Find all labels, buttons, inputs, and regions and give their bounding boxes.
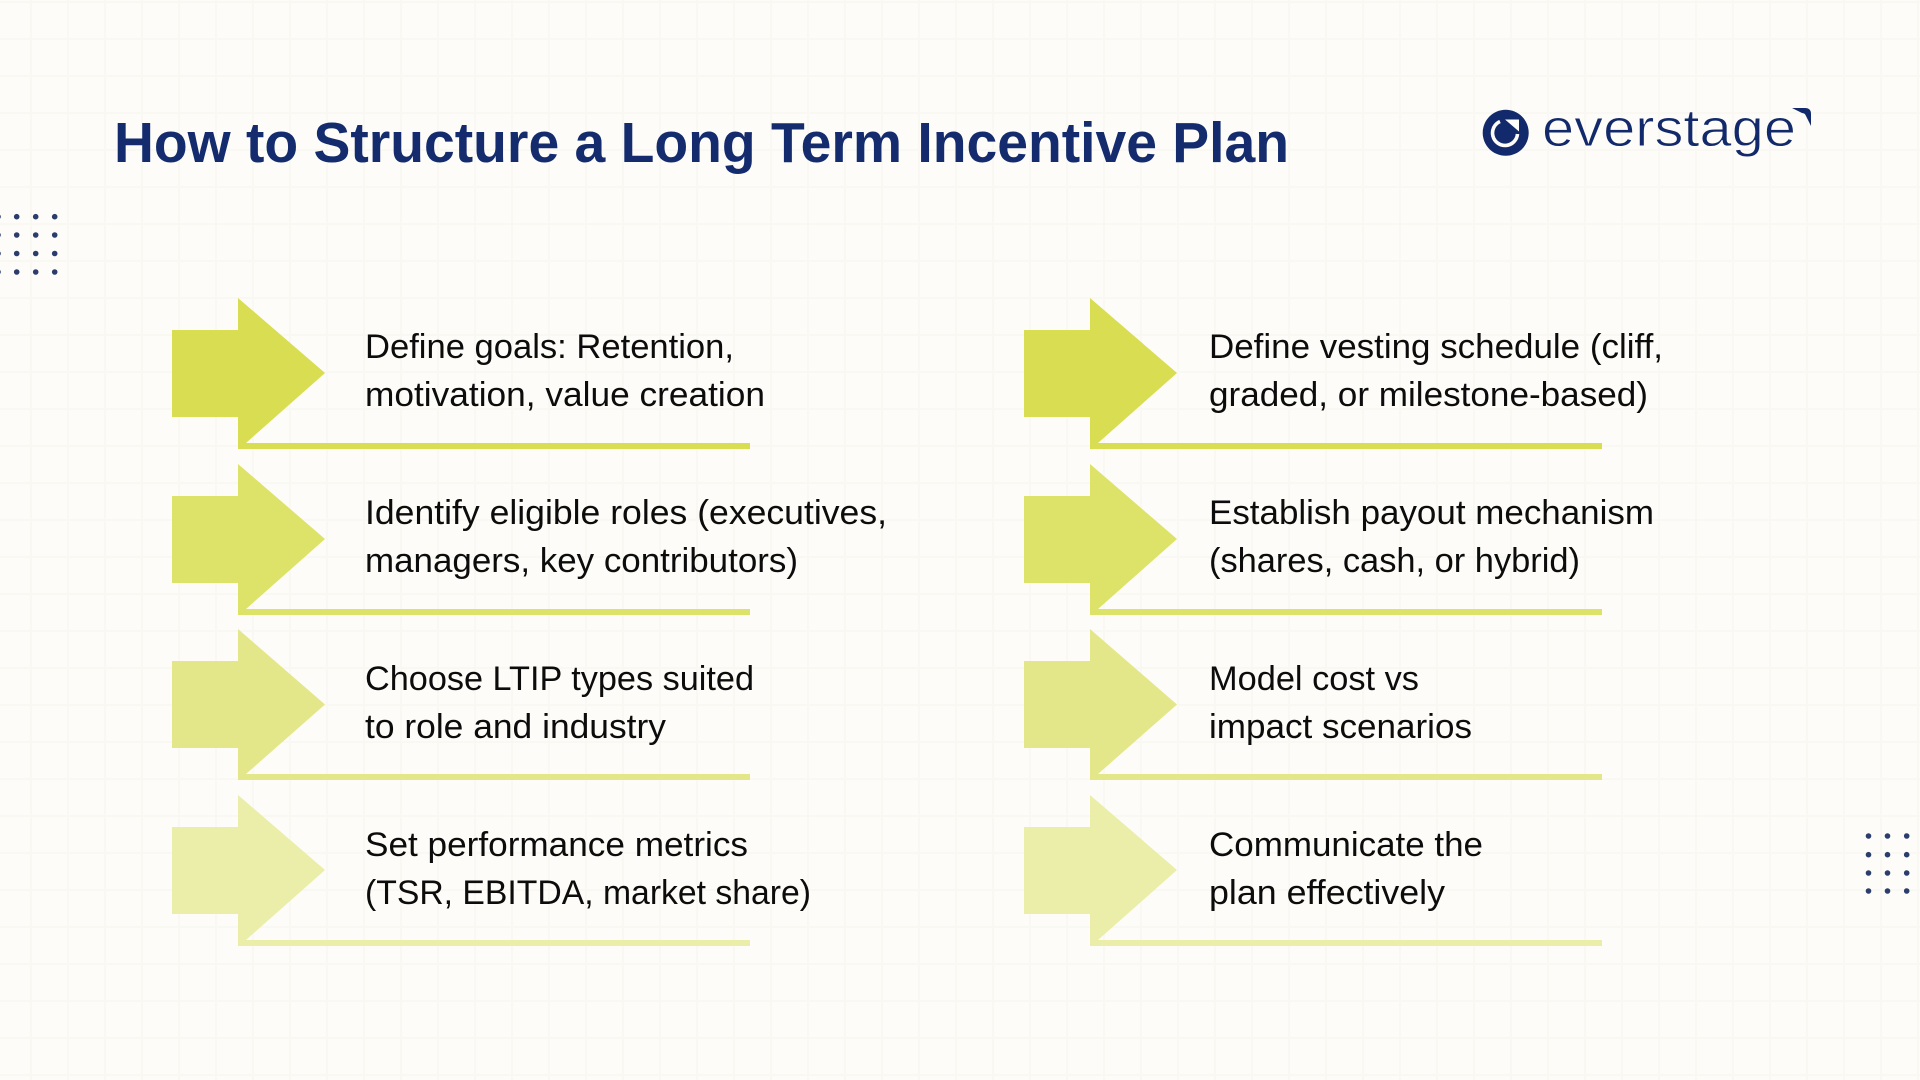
step text: plan effectively bbox=[1209, 874, 1446, 912]
step text: managers, key contributors) bbox=[365, 542, 798, 580]
step: set performance metrics bbox=[172, 795, 811, 946]
step: establish payout mechanism bbox=[1024, 464, 1654, 615]
step: model cost vs impact bbox=[1024, 629, 1602, 780]
decorative dots: right bbox=[1866, 833, 1909, 894]
step text: Identify eligible roles (executives, bbox=[365, 494, 887, 532]
step text: Define vesting schedule (cliff, bbox=[1209, 328, 1663, 366]
arrow bbox=[172, 464, 750, 615]
decorative dots: left bbox=[0, 214, 57, 275]
step: identify eligible roles bbox=[172, 464, 887, 615]
step text: Communicate the bbox=[1209, 826, 1483, 864]
step: choose LTIP types bbox=[172, 629, 754, 780]
arrow bbox=[172, 629, 750, 780]
step text: Choose LTIP types suited bbox=[365, 660, 754, 698]
step text: Model cost vs bbox=[1209, 660, 1419, 698]
step: define vesting schedule bbox=[1024, 298, 1663, 449]
arrow bbox=[172, 795, 750, 946]
step text: Establish payout mechanism bbox=[1209, 494, 1654, 532]
logo wordmark: everstage bbox=[1542, 99, 1796, 158]
step: define goals bbox=[172, 298, 765, 449]
step text: graded, or milestone-based) bbox=[1209, 376, 1648, 414]
step text: impact scenarios bbox=[1209, 708, 1472, 746]
arrow bbox=[1024, 795, 1602, 946]
logo: everstage bbox=[1483, 99, 1811, 158]
arrow bbox=[172, 298, 750, 449]
title: How to Structure a Long Term Incentive Plan bbox=[114, 111, 1289, 175]
step text: Set performance metrics bbox=[365, 826, 748, 864]
arrow bbox=[1024, 298, 1602, 449]
step text: Define goals: Retention, bbox=[365, 328, 734, 366]
step text: to role and industry bbox=[365, 708, 667, 746]
step text: (shares, cash, or hybrid) bbox=[1209, 542, 1580, 580]
arrow bbox=[1024, 629, 1602, 780]
arrow bbox=[1024, 464, 1602, 615]
step text: (TSR, EBITDA, market share) bbox=[365, 874, 811, 912]
step: communicate the plan bbox=[1024, 795, 1602, 946]
step text: motivation, value creation bbox=[365, 376, 765, 414]
icon: logo mark bbox=[1483, 110, 1529, 156]
logo accent bbox=[1792, 108, 1811, 126]
